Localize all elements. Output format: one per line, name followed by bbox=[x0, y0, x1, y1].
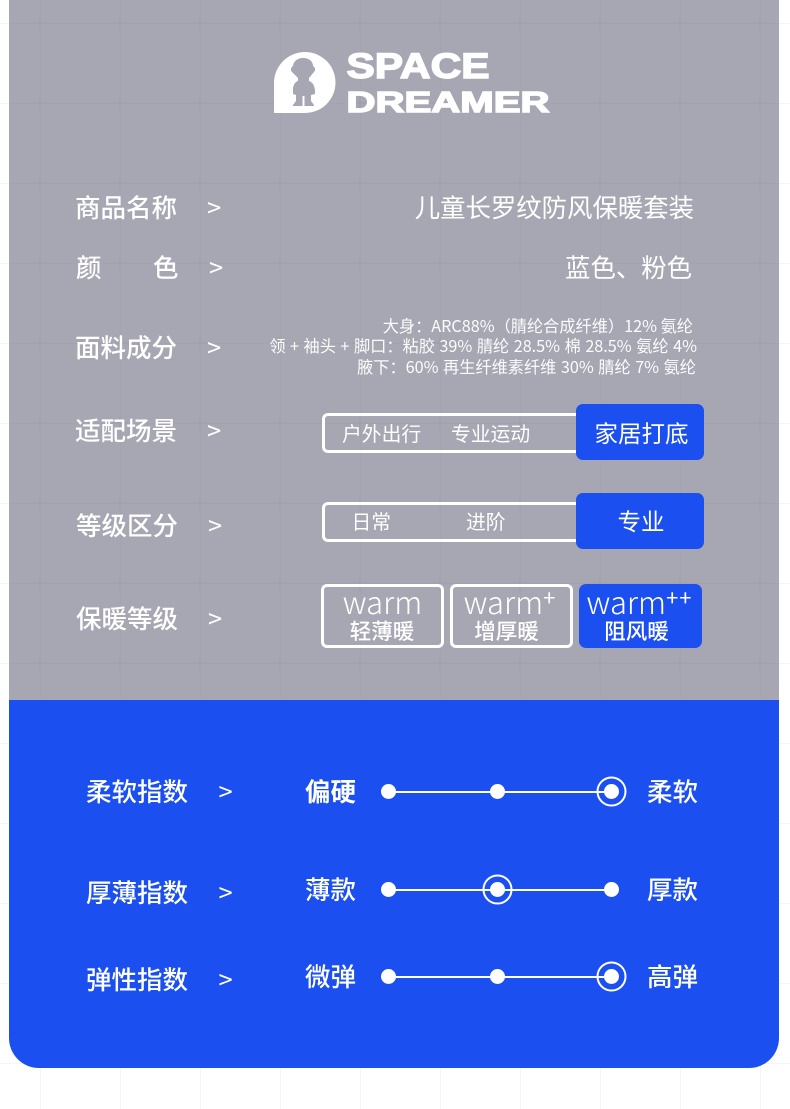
warmth card: light bbox=[321, 584, 444, 648]
scene selector: 户外出行 bbox=[342, 418, 421, 447]
label: elasticity: 弹性指数 bbox=[86, 960, 188, 997]
warmth card: thick bbox=[450, 584, 573, 648]
label: color bbox=[76, 248, 179, 285]
label: product name: 商品名称 bbox=[75, 188, 177, 225]
warmth card: windproof: 阻风暖 bbox=[604, 615, 669, 646]
fabric composition text bbox=[269, 313, 697, 378]
slider: elasticity bbox=[381, 962, 626, 992]
level selector bbox=[322, 493, 704, 549]
scene selector: 家居打底 bbox=[594, 415, 688, 449]
arrow: > bbox=[208, 507, 222, 543]
scene selector: 专业运动 bbox=[451, 418, 530, 447]
logo: SPACE bbox=[346, 47, 490, 86]
arrow: > bbox=[218, 961, 233, 997]
label: color: 色 bbox=[153, 248, 179, 285]
logo: DREAMER bbox=[346, 87, 550, 119]
warmth card: light: 轻薄暖 bbox=[350, 615, 414, 646]
arrow: > bbox=[207, 412, 221, 448]
warmth card: thick: 增厚暖 bbox=[474, 615, 539, 646]
right label: 高弹 bbox=[647, 957, 698, 994]
value: product name: 儿童长罗纹防风保暖套装 bbox=[415, 189, 694, 225]
left label: 薄款 bbox=[305, 870, 356, 907]
panel: product details bbox=[9, 0, 779, 700]
warmth card: light: warm bbox=[343, 578, 422, 623]
warmth card: thick: warm+ bbox=[464, 578, 555, 623]
arrow: > bbox=[218, 874, 233, 910]
label: scene: 适配场景 bbox=[75, 411, 177, 448]
arrow: > bbox=[208, 600, 222, 636]
warmth card: windproof: warm++ bbox=[587, 578, 692, 623]
right label: 柔软 bbox=[647, 772, 698, 809]
slider: softness bbox=[381, 776, 626, 806]
value: color: 蓝色、粉色 bbox=[565, 249, 692, 285]
panel: indices bbox=[9, 700, 779, 1068]
label: color: 颜 bbox=[76, 248, 102, 285]
level selector: 专业 bbox=[618, 503, 664, 537]
left label: 微弹 bbox=[305, 957, 356, 994]
fabric composition text: 领 + 袖头 + 脚口：粘胶 39% 腈纶 28.5% 棉 28.5% 氨纶 4% bbox=[269, 333, 697, 357]
fabric composition text: 大身：ARC88%（腈纶合成纤维）12% 氨纶 bbox=[383, 313, 693, 337]
fabric composition text: 腋下：60% 再生纤维素纤维 30% 腈纶 7% 氨纶 bbox=[357, 354, 696, 378]
right label: 厚款 bbox=[647, 870, 698, 907]
label: warmth: 保暖等级 bbox=[76, 599, 178, 636]
level selector: 进阶 bbox=[466, 506, 506, 535]
arrow: > bbox=[207, 329, 221, 365]
label: softness: 柔软指数 bbox=[86, 772, 188, 809]
arrow: > bbox=[209, 249, 223, 285]
level selector: 日常 bbox=[352, 506, 391, 535]
logo bbox=[274, 47, 550, 119]
label: fabric: 面料成分 bbox=[75, 328, 177, 365]
warmth card: windproof bbox=[579, 584, 702, 648]
label: level: 等级区分 bbox=[76, 506, 178, 543]
arrow: > bbox=[207, 189, 221, 225]
scene selector bbox=[322, 404, 704, 460]
left label: 偏硬 bbox=[305, 772, 356, 809]
slider: thickness bbox=[381, 874, 619, 904]
label: thickness: 厚薄指数 bbox=[86, 873, 188, 910]
arrow: > bbox=[218, 773, 233, 809]
